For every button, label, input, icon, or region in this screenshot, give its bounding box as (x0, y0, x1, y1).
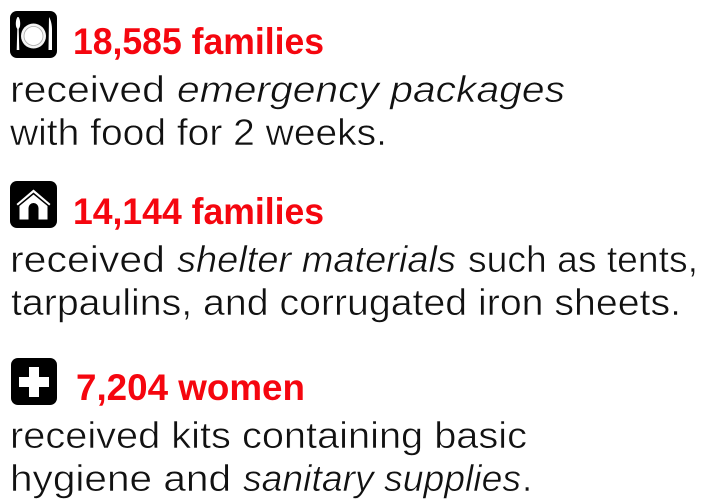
heading: 7,204 women: 7,204 women (76, 367, 305, 408)
text block: shelter materials (10, 239, 698, 323)
panel: shelter materials (10, 181, 698, 323)
text block: emergency packages (9, 69, 565, 153)
heading: 14,144 families: 14,144 families (73, 191, 324, 232)
text block: emergency packages: received (10, 69, 165, 110)
panel: food packages (9, 11, 565, 153)
text block: hygiene supplies: sanitary supplies (243, 458, 521, 499)
icon: plate and cutlery (10, 11, 57, 58)
text block: shelter materials: such as tents, (468, 239, 698, 280)
heading: 18,585 families: 18,585 families (73, 21, 324, 62)
text block: hygiene supplies: hygiene and (10, 458, 231, 499)
panel: hygiene kits (10, 358, 532, 499)
text block: shelter materials: received (10, 239, 165, 280)
icon: house (10, 181, 57, 228)
text block: hygiene supplies: . (522, 458, 532, 499)
text block: emergency packages: with food for 2 weeks. (9, 112, 387, 153)
text block: shelter materials: shelter materials (177, 239, 456, 280)
text block: emergency packages: emergency packages (177, 69, 565, 110)
text block: hygiene supplies: received kits containing basic (10, 415, 527, 456)
text block: shelter materials: tarpaulins, and corrugated iron sheets. (11, 282, 681, 323)
text block: hygiene supplies (10, 415, 532, 499)
icon: medical cross (11, 358, 57, 405)
